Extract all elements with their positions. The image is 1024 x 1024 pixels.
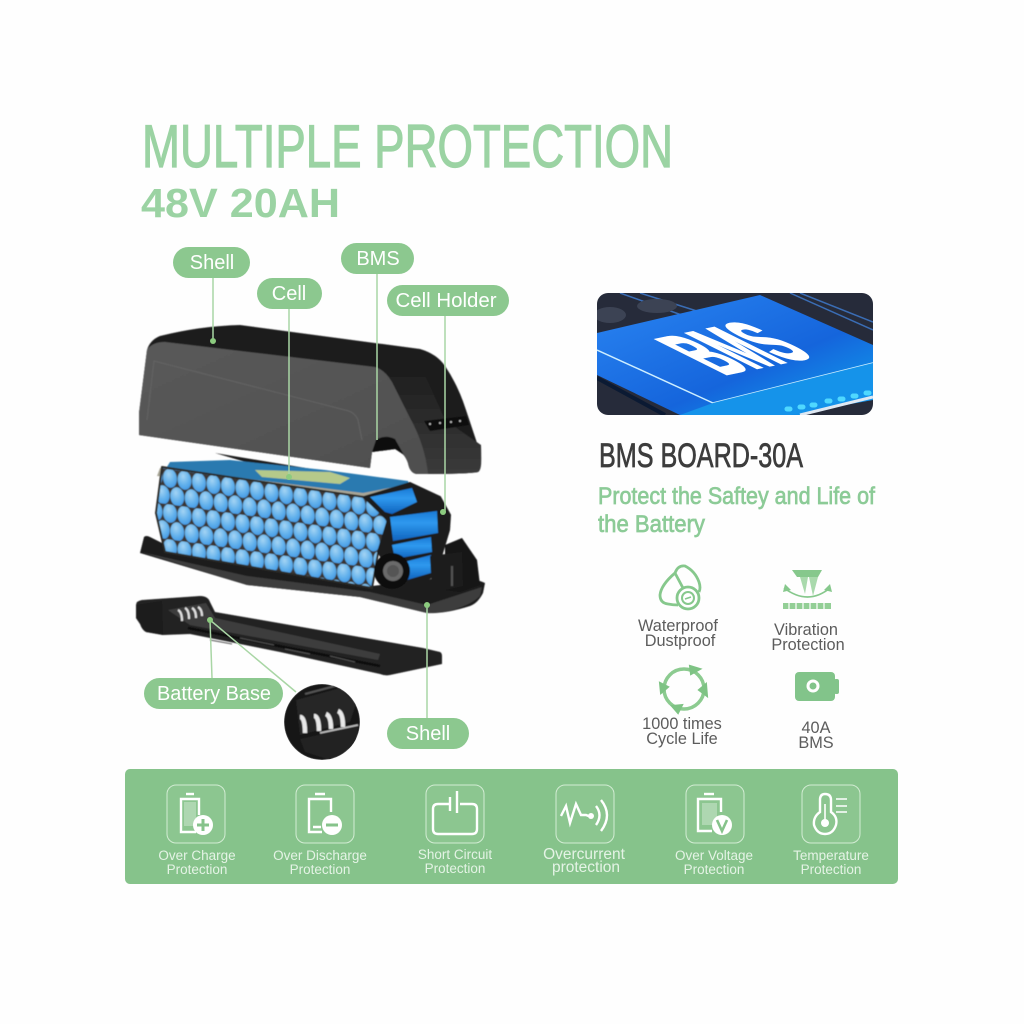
label: BMS bbox=[341, 243, 414, 274]
protection: overcurrent: Overcurrent bbox=[543, 846, 626, 863]
battery base rail bbox=[136, 596, 442, 675]
label: Cell: Cell bbox=[272, 283, 306, 305]
label: Battery Base bbox=[144, 678, 283, 709]
feature: cycle life bbox=[642, 666, 722, 748]
feature: waterproof dustproof: Waterproof bbox=[638, 617, 718, 635]
label: Shell bbox=[173, 247, 250, 278]
feature: vibration protection: Protection bbox=[771, 636, 845, 654]
icon: water drop shield bbox=[660, 566, 700, 609]
subtitle: 48V 20AH bbox=[141, 180, 340, 226]
feature: vibration protection bbox=[771, 570, 845, 654]
label: Cell bbox=[257, 278, 322, 309]
upper shell bbox=[139, 325, 481, 474]
protection: over charge: Over Charge bbox=[158, 848, 236, 863]
label: Shell lower: Shell bbox=[406, 723, 450, 745]
subheading: Protect the Saftey and Life of bbox=[598, 483, 875, 510]
BMS chip image bbox=[594, 293, 873, 415]
protection: over charge bbox=[158, 785, 236, 877]
icon: cycle arrows bbox=[660, 666, 707, 713]
protection: temperature: Protection bbox=[801, 862, 861, 877]
protection: short circuit: Protection bbox=[425, 861, 485, 876]
subheading: the Battery bbox=[598, 511, 705, 538]
protection: short circuit bbox=[418, 785, 492, 876]
protection: over discharge bbox=[273, 785, 367, 877]
protection: temperature: Temperature bbox=[793, 848, 869, 863]
protection: temperature bbox=[793, 785, 869, 877]
heading: BMS board: BMS BOARD-30A bbox=[599, 437, 803, 475]
protection: over discharge: Protection bbox=[290, 862, 350, 877]
label: BMS: BMS bbox=[356, 248, 400, 270]
protection: short circuit: Short Circuit bbox=[418, 847, 492, 862]
BMS chip lettering: BMS bbox=[632, 311, 838, 386]
protection: over voltage bbox=[675, 785, 753, 877]
icon: battery gear bbox=[795, 672, 839, 701]
label: Battery Base: Battery Base bbox=[157, 683, 271, 705]
title: MULTIPLE PROTECTION bbox=[142, 113, 673, 180]
cell pack front face bbox=[156, 467, 388, 588]
feature: cycle life: Cycle Life bbox=[646, 730, 718, 748]
cell pack top bbox=[157, 453, 412, 500]
subheading bbox=[598, 483, 875, 538]
protection panel bbox=[125, 769, 898, 884]
feature: 40A BMS: BMS bbox=[798, 734, 834, 752]
protection: over discharge: Over Discharge bbox=[273, 848, 367, 863]
icon: vibration bbox=[783, 570, 832, 609]
feature: waterproof dustproof bbox=[638, 566, 718, 650]
leader lines bbox=[207, 274, 446, 718]
protection: over voltage: Over Voltage bbox=[675, 848, 753, 863]
connector detail inset bbox=[284, 684, 360, 760]
label: Cell Holder bbox=[387, 285, 509, 316]
label: Cell Holder: Cell Holder bbox=[396, 290, 497, 312]
protection: over charge: Protection bbox=[167, 862, 227, 877]
feature: waterproof dustproof: Dustproof bbox=[645, 632, 716, 650]
battery tray base bbox=[140, 536, 485, 613]
cylinders and cell holder bbox=[364, 483, 450, 588]
label: Shell lower bbox=[387, 718, 469, 749]
feature: 40A BMS: 40A bbox=[802, 719, 831, 737]
end connector and knob bbox=[374, 538, 480, 593]
protection: overcurrent bbox=[543, 785, 626, 876]
protection: overcurrent: protection bbox=[552, 859, 620, 876]
label: Shell: Shell bbox=[190, 252, 234, 274]
feature: cycle life: 1000 times bbox=[642, 715, 722, 733]
feature: vibration protection: Vibration bbox=[774, 621, 838, 639]
protection: over voltage: Protection bbox=[684, 862, 744, 877]
battery exploded view bbox=[136, 325, 485, 675]
feature: 40A BMS bbox=[795, 672, 839, 752]
